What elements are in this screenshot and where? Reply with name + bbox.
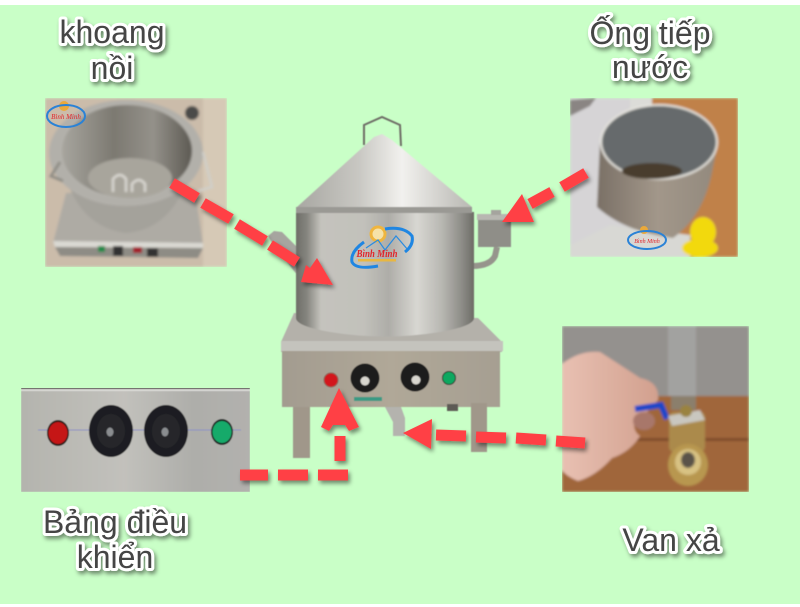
teal strip bbox=[354, 397, 382, 401]
heading: khoang nồi: khoang bbox=[60, 14, 164, 50]
right water cup bbox=[472, 210, 511, 266]
red indicator light bbox=[324, 373, 338, 387]
right thermostat dial bbox=[400, 362, 430, 392]
pot rim bbox=[296, 207, 472, 213]
arrow: control panel to base bbox=[240, 388, 359, 475]
logo: photo 1 watermark bbox=[47, 101, 85, 127]
arrow: van xả to valve bbox=[403, 419, 585, 449]
logo: photo 2 watermark bbox=[628, 226, 666, 249]
heading: van xả: Van xả bbox=[622, 522, 720, 558]
green indicator light bbox=[442, 372, 456, 384]
pot body bbox=[296, 212, 474, 336]
heading: khoang nồi bbox=[60, 14, 164, 86]
heading: ống tiếp nước: Ống tiếp bbox=[590, 15, 710, 51]
legs bbox=[293, 403, 487, 458]
panel: khoang nồi photo bbox=[45, 98, 227, 267]
lid handle bbox=[364, 117, 401, 146]
left handle bbox=[268, 231, 298, 276]
heading: bảng điều khiển: Bảng điều bbox=[43, 504, 187, 540]
arrow: khoang nồi to pot bbox=[172, 183, 333, 285]
arrow: ống tiếp nước to cup bbox=[502, 173, 586, 222]
logo: photo 1 watermark: Bình Minh bbox=[51, 113, 81, 121]
heading: ống tiếp nước bbox=[590, 15, 710, 85]
lid cone bbox=[297, 134, 472, 207]
base cabinet bbox=[282, 351, 500, 407]
panel: bảng điều khiển photo bbox=[21, 387, 250, 492]
panel: van xả photo bbox=[562, 326, 749, 492]
heading: bảng điều khiển: khiển bbox=[77, 539, 153, 575]
panel: ống tiếp nước photo bbox=[570, 98, 738, 257]
left thermostat dial bbox=[350, 364, 380, 392]
logo: Bình Minh on pot bbox=[352, 227, 412, 267]
base top plate bbox=[281, 313, 502, 352]
logo: photo 2 watermark: Bình Minh bbox=[634, 239, 660, 245]
heading: ống tiếp nước: nước bbox=[612, 49, 688, 85]
logo: Bình Minh on pot: Bình Minh bbox=[356, 248, 398, 260]
heading: khoang nồi: nồi bbox=[91, 50, 133, 86]
drain valve bbox=[385, 407, 405, 436]
heading: bảng điều khiển bbox=[43, 504, 187, 575]
product: steamer pot bbox=[268, 117, 511, 458]
